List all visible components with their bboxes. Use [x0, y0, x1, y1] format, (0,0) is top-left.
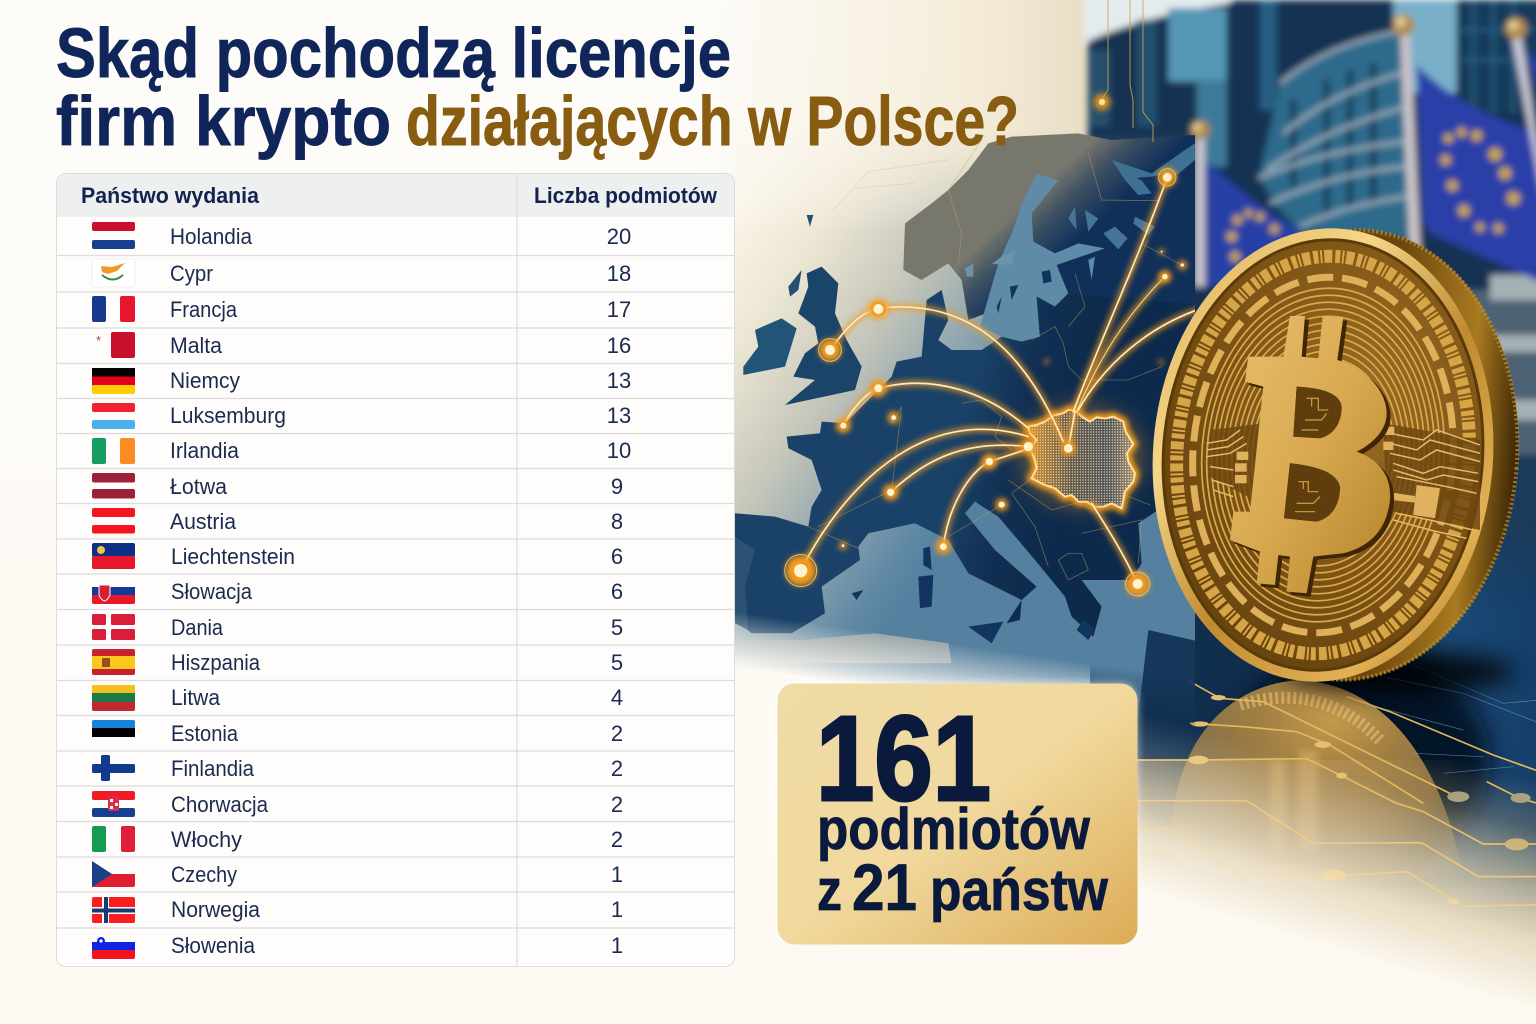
row: Łotwa: 9: [611, 474, 623, 499]
row: Finlandia: [92, 755, 623, 781]
title: firm krypto: [56, 82, 391, 160]
callout: 161 entities from 21 countries: 161: [816, 690, 991, 826]
row: Norwegia: 1: [611, 897, 623, 922]
location nodes: [785, 168, 1187, 596]
row: Liechtenstein: [92, 543, 623, 569]
row: Niemcy: 13: [607, 368, 631, 393]
row: Dania: [92, 614, 623, 640]
row: Austria: 8: [611, 509, 623, 534]
coin shadow: [1285, 652, 1515, 692]
row: Chorwacja: 2: [611, 792, 623, 817]
coin face: [1136, 215, 1510, 695]
callout: 161 entities from 21 countries: 21: [852, 850, 917, 924]
table header: Liczba podmiotów: [534, 183, 718, 208]
row: Hiszpania: [92, 649, 623, 675]
map of Europe with connections to Poland: [735, 133, 1195, 726]
title: Skąd pochodzą licencje: [56, 14, 731, 92]
row: Irlandia: Irlandia: [170, 438, 240, 463]
map: Africa: [735, 633, 952, 663]
row: Czechy: Czechy: [171, 862, 237, 887]
Baltic sea: [980, 173, 1105, 342]
row: Włochy: [92, 826, 623, 852]
row: Słowenia: [92, 933, 623, 959]
map: sea: [735, 137, 1195, 717]
row: Litwa: Litwa: [171, 685, 221, 710]
row: Holandia: [92, 222, 631, 249]
row: Luksemburg: Luksemburg: [170, 403, 286, 428]
row: Francja: 17: [607, 297, 631, 322]
row: Łotwa: Łotwa: [170, 474, 228, 499]
map: land masses: [735, 133, 1195, 728]
callout: 161 entities from 21 countries: podmiotów: [817, 797, 1091, 862]
row: Niemcy: Niemcy: [170, 368, 240, 393]
background photo: EU building with flags: [1083, 0, 1536, 640]
row: Słowenia: Słowenia: [171, 933, 256, 958]
row: Luksemburg: [92, 403, 631, 429]
row: Chorwacja: [92, 791, 623, 817]
row: Liechtenstein: 6: [611, 544, 623, 569]
row: Holandia: 20: [607, 224, 631, 249]
map: Mediterranean islands: [852, 547, 1003, 643]
bitcoin coin: [1136, 215, 1535, 695]
row: Francja: Francja: [170, 297, 238, 322]
row: Liechtenstein: Liechtenstein: [171, 544, 295, 569]
top map node: [1094, 94, 1110, 110]
row: Norwegia: Norwegia: [171, 897, 261, 922]
row: Irlandia: 10: [607, 438, 631, 463]
row: Słowacja: 6: [611, 579, 623, 604]
row: Finlandia: 2: [611, 756, 623, 781]
row: Malta: *: [96, 333, 101, 348]
coin reflection: [1171, 680, 1462, 885]
circuit traces: [1137, 665, 1536, 980]
row: Dania: Dania: [171, 615, 224, 640]
callout: 161 entities from 21 countries: [777, 683, 1138, 945]
row: Austria: [92, 508, 623, 534]
row: Malta: Malta: [170, 333, 223, 358]
row: Włochy: 2: [611, 827, 623, 852]
row: Chorwacja: Chorwacja: [171, 792, 269, 817]
row: Finlandia: Finlandia: [171, 756, 255, 781]
row: Estonia: 2: [611, 721, 623, 746]
row: Francja: [92, 296, 631, 322]
row: Litwa: [92, 685, 623, 711]
floor with gold circuit lines and coin reflection: [1090, 556, 1536, 1000]
row: Słowacja: Słowacja: [171, 579, 253, 604]
table header: [57, 174, 734, 217]
row: Luksemburg: 13: [607, 403, 631, 428]
title: [56, 14, 1019, 160]
table header: Państwo wydania: [81, 183, 260, 208]
connection arcs: [801, 177, 1202, 584]
row: Estonia: Estonia: [171, 721, 239, 746]
White sea: [1112, 143, 1195, 195]
row: Austria: Austria: [170, 509, 237, 534]
map: thin borders: [808, 140, 1182, 580]
row: Malta: [96, 332, 631, 358]
row: Hiszpania: 5: [611, 650, 623, 675]
callout: 161 entities from 21 countries: państw: [930, 858, 1109, 923]
row: Czechy: 1: [611, 862, 623, 887]
row: Łotwa: [92, 473, 623, 499]
row: Hiszpania: Hiszpania: [171, 650, 261, 675]
row: Litwa: 4: [611, 685, 623, 710]
row: Słowenia: 1: [611, 933, 623, 958]
coin edge: [1165, 217, 1535, 693]
panel: table of issuing countries: [56, 174, 734, 966]
top gold lines from map: [1100, 0, 1153, 142]
row: Cypr: [92, 259, 631, 287]
row: Niemcy: [92, 368, 631, 394]
row: Cypr: 18: [607, 261, 631, 286]
coin circuit details and bitcoin symbol: [1207, 316, 1480, 597]
row: Dania: 5: [611, 615, 623, 640]
row: Czechy: [92, 861, 623, 887]
row: Malta: 16: [607, 333, 631, 358]
callout: 161 entities from 21 countries: z: [817, 858, 842, 923]
map: Poland highlighted: [1018, 403, 1145, 510]
map: British Isles: [785, 267, 862, 405]
title: działających w Polsce?: [406, 82, 1019, 160]
EU flags: [1190, 14, 1536, 287]
row: Norwegia: [92, 897, 623, 923]
row: Estonia: [92, 720, 623, 746]
row: Irlandia: [92, 438, 631, 464]
row: Cypr: Cypr: [170, 261, 213, 286]
row: Słowacja: [92, 579, 623, 604]
row: Holandia: Holandia: [170, 224, 253, 249]
row: Włochy: Włochy: [171, 827, 242, 852]
